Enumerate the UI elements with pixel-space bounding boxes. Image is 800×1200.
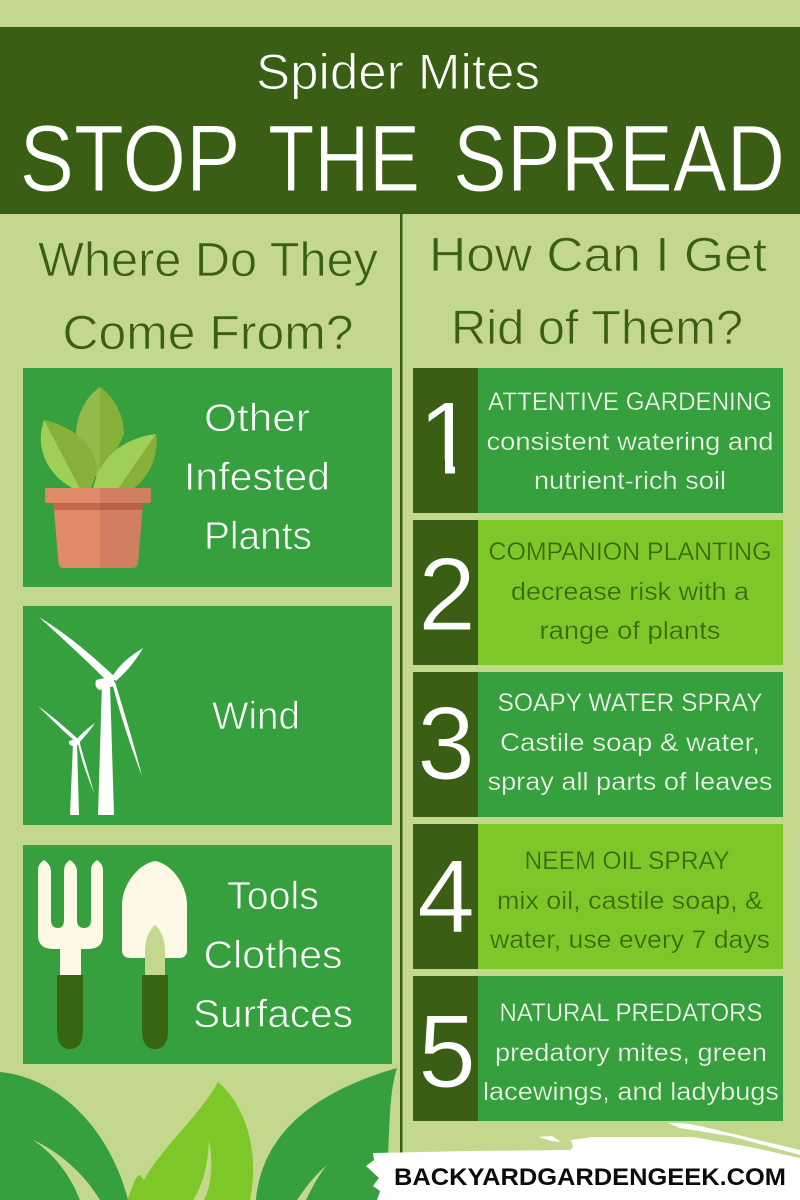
leaf: left	[0, 1072, 128, 1200]
heading: where do they come from	[38, 234, 378, 360]
step 2: decrease risk with a	[511, 578, 749, 606]
decorative leaves	[0, 1068, 397, 1200]
icon: wind turbines	[38, 617, 143, 815]
step 5: predatory mites, green	[495, 1039, 767, 1067]
website banner	[366, 1123, 800, 1200]
leaf: centre	[127, 1082, 253, 1200]
website text: BACKYARDGARDENGEEK.COM	[394, 1164, 786, 1191]
step 1	[413, 368, 783, 513]
heading: how can I get rid of them	[429, 229, 767, 355]
step 3: spray all parts of leaves	[488, 768, 772, 796]
step 4: 4	[417, 839, 475, 955]
main title	[20, 106, 785, 212]
label: Other	[204, 397, 310, 440]
step 2: COMPANION PLANTING	[488, 538, 772, 566]
step 4: NEEM OIL SPRAY	[524, 847, 730, 875]
leaf: right	[256, 1068, 397, 1200]
main title: THE	[268, 106, 420, 212]
heading: where do they come from: Where Do They	[38, 234, 378, 287]
title banner	[0, 27, 800, 214]
step 3: SOAPY WATER SPRAY	[498, 689, 763, 717]
step 3	[413, 672, 783, 817]
step 2	[413, 520, 783, 665]
step 1: consistent watering and	[486, 428, 774, 456]
step 5: NATURAL PREDATORS	[500, 999, 762, 1027]
label: Tools	[227, 875, 319, 918]
step 1: nutrient-rich soil	[534, 467, 726, 495]
label	[193, 875, 353, 1036]
step 1: 1	[418, 381, 476, 497]
label: Plants	[204, 515, 312, 558]
step 3: Castile soap & water,	[500, 729, 760, 757]
step 4: water, use every 7 days	[489, 926, 770, 954]
step 2: range of plants	[540, 617, 720, 645]
icon: potted plant	[41, 387, 157, 568]
panel: wind	[23, 606, 392, 825]
step 5: lacewings, and ladybugs	[483, 1078, 779, 1106]
label: Wind	[212, 695, 300, 738]
panel: tools clothes surfaces	[23, 845, 392, 1064]
step 5: 5	[418, 994, 476, 1110]
panel: other infested plants	[23, 368, 392, 587]
label: Surfaces	[193, 993, 353, 1036]
icon: garden fork	[38, 860, 103, 1049]
subtitle: Spider Mites	[256, 44, 540, 100]
label	[184, 397, 330, 558]
main title: STOP	[20, 106, 240, 212]
label: Infested	[184, 456, 330, 499]
heading: how can I get rid of them: Rid of Them?	[451, 302, 743, 355]
heading: how can I get rid of them: How Can I Get	[429, 229, 767, 282]
step 5	[413, 976, 783, 1121]
step 4	[413, 824, 783, 969]
step 1: ATTENTIVE GARDENING	[488, 388, 772, 416]
label: Clothes	[204, 934, 342, 977]
icon: trowel	[122, 861, 187, 1049]
step 2: 2	[418, 537, 476, 653]
step 4: mix oil, castile soap, &	[497, 887, 763, 915]
step 3: 3	[417, 686, 475, 802]
heading: where do they come from: Come From?	[62, 307, 354, 360]
